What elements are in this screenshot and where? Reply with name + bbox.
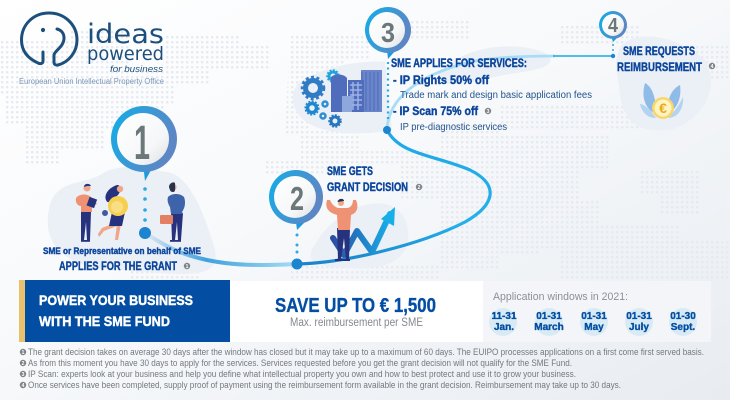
- window: May: [580, 308, 608, 336]
- window: May: 01-31: [581, 311, 607, 322]
- connector dots 2: [292, 234, 302, 270]
- euro coin with leaves: €: [659, 100, 667, 116]
- window: September: [669, 308, 697, 336]
- step 3 text: Trade mark and design basic application fees: [400, 90, 592, 101]
- step 1 text: APPLIES FOR THE GRANT: [59, 259, 178, 273]
- step 4 text: SME REQUESTS: [623, 46, 695, 58]
- note badge 1: 1: [186, 264, 189, 270]
- strong person: [326, 199, 357, 261]
- step 1 text: SME or Representative on behalf of SME: [43, 246, 201, 256]
- gold accent: [19, 280, 25, 342]
- window: March: [534, 308, 564, 336]
- people illustration: [76, 182, 185, 242]
- dotted world map: [0, 20, 730, 280]
- step 4 text: [617, 46, 715, 74]
- buildings: [331, 70, 382, 112]
- step 3: [302, 7, 592, 134]
- connector dots 1: [139, 187, 151, 239]
- panel: savings: Max. reimbursement per SME: [290, 317, 423, 329]
- step 2 text: GRANT DECISION: [327, 182, 408, 194]
- step 1: [43, 106, 201, 273]
- panel: savings: SAVE UP TO € 1,500: [275, 295, 436, 317]
- person with briefcase: [160, 182, 185, 242]
- step 4: [599, 11, 715, 119]
- note badge 3: [485, 108, 491, 115]
- note badge 4: 4: [711, 64, 714, 70]
- panel: fund title: [25, 280, 230, 342]
- marker 4: 4: [608, 15, 619, 37]
- connector dots 4: [611, 44, 615, 58]
- step 4 text: REIMBURSEMENT: [617, 62, 702, 74]
- window: March: March: [534, 322, 564, 333]
- step 3 text: - IP Rights 50% off: [393, 73, 490, 87]
- step 3 text: SME APPLIES FOR SERVICES:: [391, 58, 527, 70]
- step 3 text: - IP Scan 75% off: [393, 104, 479, 118]
- marker 3: [365, 7, 411, 59]
- window: March: 01-31: [536, 311, 562, 322]
- note badge 1: [184, 263, 190, 270]
- window: January: 11-31: [491, 311, 517, 322]
- window: July: July: [629, 322, 649, 333]
- marker 1: [111, 106, 177, 181]
- logo: for business: [110, 64, 163, 75]
- note badge 3: 3: [487, 109, 490, 115]
- footnote 3: 3: [22, 372, 25, 378]
- journey route: [145, 56, 613, 265]
- step 2: [269, 166, 422, 270]
- footnote 4: Once services have been completed, supply proof of payment using the reimbursement form available in the grant decision. Reimbursement may take up to 30 days.: [28, 380, 621, 390]
- footnote 2: As from this moment you have 30 days to apply for the services. Services requested before you get the grant decision will not qualify for the SME Fund.: [28, 358, 572, 368]
- step 3 text: IP pre-diagnostic services: [400, 122, 507, 133]
- step 1 text: [43, 246, 201, 273]
- person with lightbulb: [98, 185, 128, 240]
- window: January: [489, 308, 517, 336]
- panel: application windows: [483, 281, 711, 342]
- window: July: 01-31: [626, 311, 652, 322]
- step 2 text: [327, 166, 422, 194]
- growth arrow: [333, 207, 395, 255]
- footnotes: [20, 347, 704, 390]
- panel: fund title: WITH THE SME FUND: [39, 313, 170, 329]
- logo wordmark: ideas: [87, 19, 164, 50]
- marker 3: 3: [381, 17, 395, 48]
- footnote 2: 2: [22, 361, 25, 367]
- logo mark: [22, 13, 77, 65]
- background blobs: [48, 36, 711, 274]
- panel: application windows: Application windows in 2021:: [493, 291, 628, 303]
- logo: [19, 13, 165, 86]
- step 2 text: SME GETS: [327, 166, 373, 178]
- step 3 text: [391, 58, 592, 133]
- person with clipboard: [76, 184, 97, 242]
- connector dots 3: [383, 62, 391, 134]
- window: January: Jan.: [494, 322, 514, 333]
- panel: fund title: POWER YOUR BUSINESS: [39, 292, 193, 308]
- footnote 1: 1: [22, 350, 25, 356]
- logo: powered: [87, 43, 164, 65]
- footnote 4: 4: [22, 383, 25, 389]
- logo: European Union Intellectual Property Office: [19, 77, 165, 86]
- panel: savings: [230, 281, 483, 342]
- window: July: [625, 308, 653, 336]
- window: September: 01-30: [670, 311, 696, 322]
- banner: [19, 280, 711, 342]
- window: September: Sept.: [671, 322, 695, 333]
- footnote 3: IP Scan: experts look at your business and help you define what intellectual property you own and how to best protect and use it to grow your business.: [28, 369, 576, 379]
- note badge 2: 2: [418, 185, 421, 191]
- marker 2: 2: [290, 180, 304, 217]
- gears: [302, 70, 341, 127]
- marker 1: 1: [134, 117, 150, 170]
- window: May: May: [584, 322, 604, 333]
- marker 2: [269, 170, 323, 230]
